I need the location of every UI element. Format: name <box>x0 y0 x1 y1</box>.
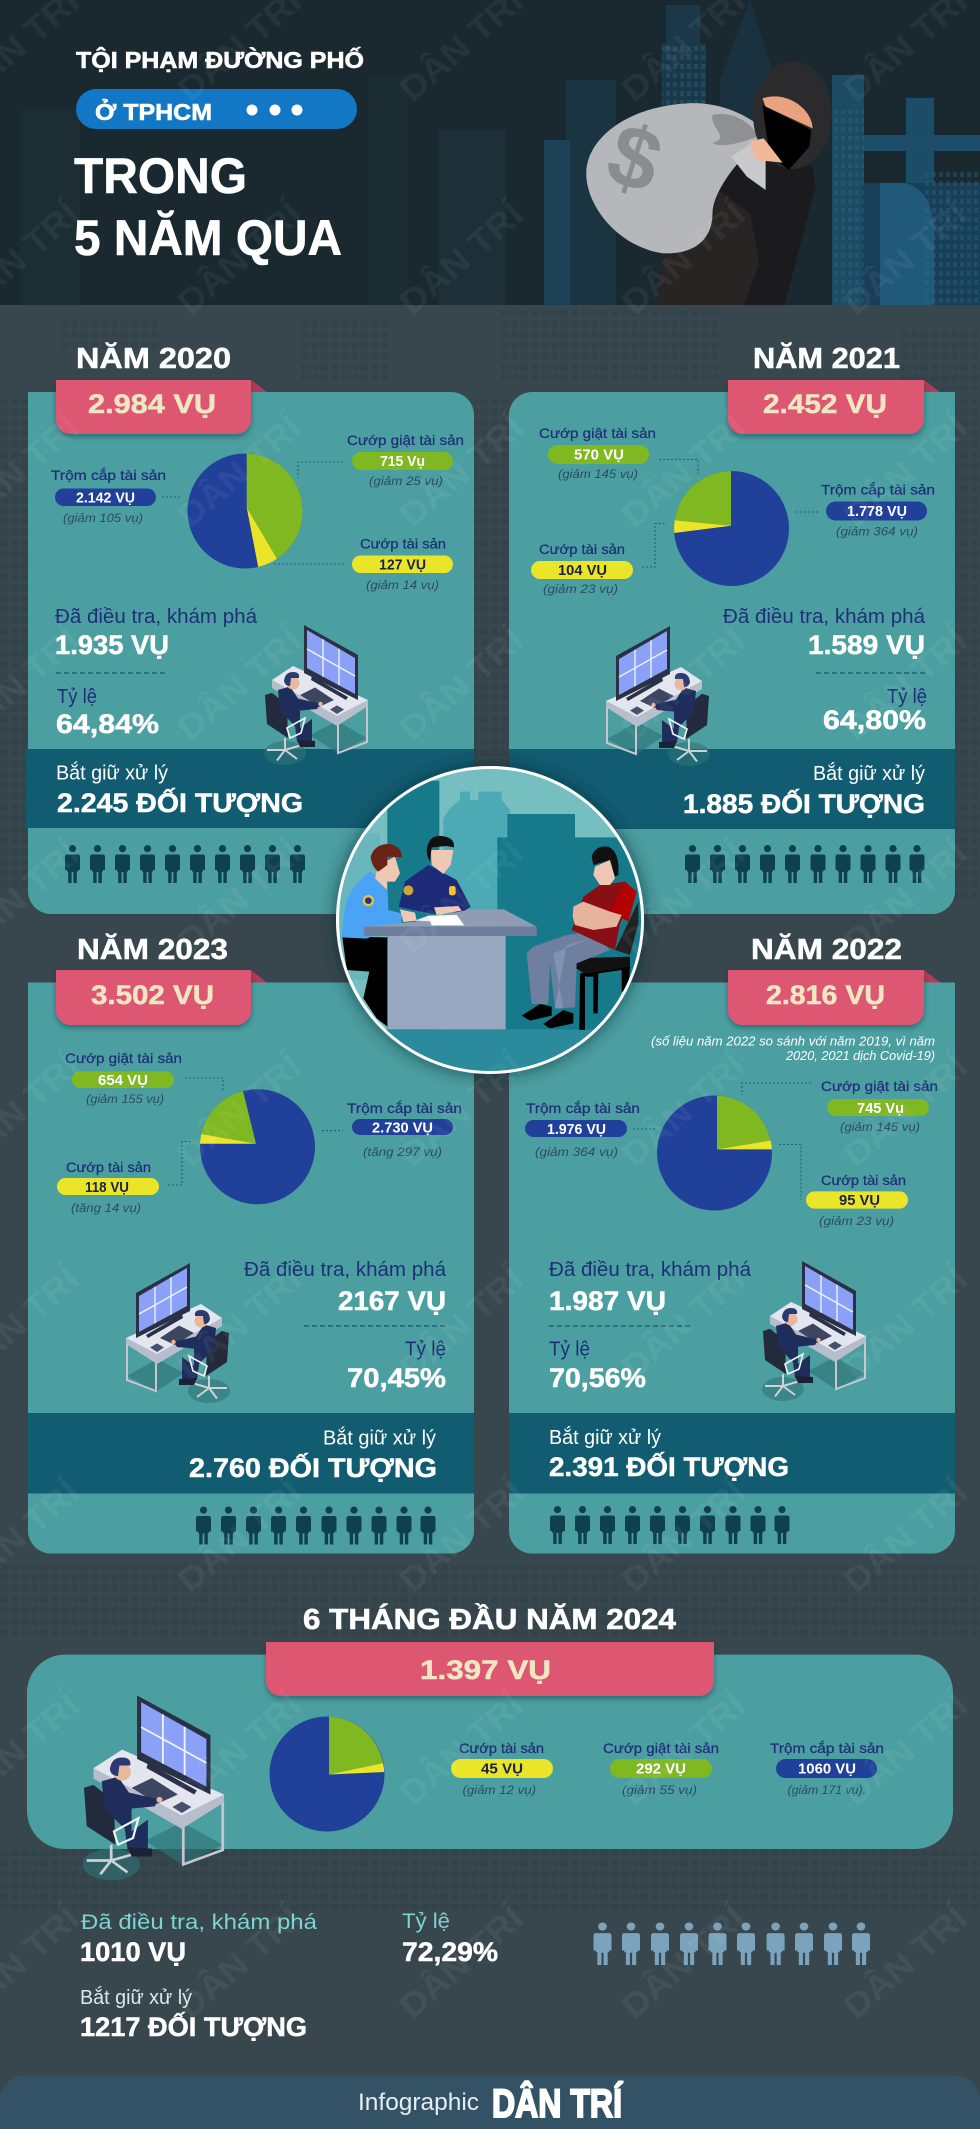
card background <box>28 392 474 914</box>
arrests band: Bắt giữ xử lý <box>813 762 925 785</box>
header city skyline <box>20 0 980 305</box>
title pill: Ở TPHCM <box>76 89 357 129</box>
label: trộm cắp: (tăng 297 vụ) <box>363 1145 442 1159</box>
label: cướp giật: 745 Vụ <box>857 1101 904 1117</box>
label: trộm cắp: Trộm cắp tài sản <box>51 467 166 483</box>
people row <box>550 1506 790 1544</box>
pie chart <box>657 1096 772 1210</box>
stats: investigated: 64,84% <box>56 709 159 739</box>
label: cướp tài sản: 127 VỤ <box>379 558 426 574</box>
label: cướp giật: 654 VỤ <box>98 1073 148 1089</box>
label: trộm cắp: 1.976 VỤ <box>547 1122 606 1138</box>
arrests band: 2.245 ĐỐI TƯỢNG <box>57 788 303 818</box>
label: cướp giật <box>603 1740 719 1797</box>
faint city window texture <box>0 310 980 1910</box>
label: cướp giật: Cướp giật tài sản <box>603 1740 719 1756</box>
footer: DÂN TRÍ <box>492 2080 623 2126</box>
arrests band <box>28 1413 474 1494</box>
icon: worker at computer <box>126 1263 230 1403</box>
stats: investigated: Tỷ lệ <box>405 1339 446 1361</box>
ribbon total <box>56 380 267 434</box>
label: cướp giật: 570 VỤ <box>574 448 624 464</box>
footer: Infographic <box>358 2089 479 2116</box>
label: cướp giật: Cướp giật tài sản <box>347 432 464 448</box>
panel: first half 2024 <box>27 1642 953 1849</box>
watermark pattern: DÂN TRÍ <box>615 1472 754 1600</box>
panel: 2022 <box>509 933 955 1554</box>
watermark pattern: DÂN TRÍ <box>393 833 532 961</box>
label: trộm cắp: Trộm cắp tài sản <box>821 482 935 498</box>
label: cướp tài sản <box>451 1740 553 1797</box>
watermark pattern: DÂN TRÍ <box>171 1685 310 1813</box>
label: trộm cắp: 1060 VỤ <box>798 1762 856 1778</box>
heading 2023: NĂM 2023 <box>77 933 228 966</box>
label: cướp giật: (giảm 155 vụ) <box>86 1092 164 1106</box>
stat: arrests 2024: Bắt giữ xử lý <box>80 1986 192 2009</box>
note about comparison: (số liệu năm 2022 so sánh với năm 2019, vì năm <box>651 1034 935 1048</box>
label: trộm cắp <box>770 1740 884 1797</box>
watermark pattern: DÂN TRÍ <box>615 194 754 322</box>
label: trộm cắp: Trộm cắp tài sản <box>770 1740 884 1756</box>
watermark pattern: DÂN TRÍ <box>393 1472 532 1600</box>
heading 2022: NĂM 2022 <box>751 933 902 966</box>
arrests band: Bắt giữ xử lý <box>323 1426 436 1450</box>
label: cướp giật: 292 VỤ <box>636 1762 686 1778</box>
watermark pattern: DÂN TRÍ <box>615 833 754 961</box>
stat: arrests 2024: 1217 ĐỐI TƯỢNG <box>80 2012 307 2042</box>
stat: investigated 2024 <box>80 1911 317 1967</box>
panel: 2020 <box>26 342 474 914</box>
label: cướp giật: Cướp giật tài sản <box>821 1078 938 1094</box>
stat: investigated 2024: Đã điều tra, khám phá <box>81 1911 317 1934</box>
watermark pattern: DÂN TRÍ <box>615 1046 754 1174</box>
label: cướp tài sản: (giảm 23 vụ) <box>819 1214 894 1228</box>
title line 1: TỘI PHẠM ĐƯỜNG PHỐ <box>76 46 364 73</box>
label: cướp giật: (giảm 145 vụ) <box>840 1120 920 1134</box>
stat: rate 2024 <box>402 1910 498 1967</box>
ribbon total <box>728 380 940 434</box>
arrests band: Bắt giữ xử lý <box>549 1426 661 1449</box>
watermark pattern: DÂN TRÍ <box>837 1898 976 2026</box>
label: cướp giật: Cướp giật tài sản <box>65 1050 182 1066</box>
arrests band: 2.760 ĐỐI TƯỢNG <box>189 1453 437 1483</box>
label: cướp giật <box>298 432 464 488</box>
ribbon total <box>266 1642 714 1696</box>
watermark pattern: DÂN TRÍ <box>615 1259 754 1387</box>
watermark pattern: DÂN TRÍ <box>837 1046 976 1174</box>
card background <box>28 982 474 1554</box>
label: trộm cắp: (giảm 364 vụ) <box>836 524 918 538</box>
watermark pattern: DÂN TRÍ <box>393 1685 532 1813</box>
watermark pattern: DÂN TRÍ <box>393 194 532 322</box>
stats: investigated: 1.987 VỤ <box>549 1286 666 1316</box>
people row <box>685 845 924 883</box>
label: cướp giật: Cướp giật tài sản <box>539 425 656 441</box>
watermark pattern: DÂN TRÍ <box>615 1685 754 1813</box>
pie chart <box>674 471 789 586</box>
label: cướp tài sản <box>274 536 453 592</box>
watermark pattern: DÂN TRÍ <box>171 1898 310 2026</box>
label: cướp giật: 715 Vụ <box>380 454 425 470</box>
watermark pattern: DÂN TRÍ <box>837 1472 976 1600</box>
arrests band: 2.391 ĐỐI TƯỢNG <box>549 1452 789 1482</box>
label: cướp tài sản <box>779 1144 908 1228</box>
label: trộm cắp: Trộm cắp tài sản <box>526 1100 640 1116</box>
heading 2020: NĂM 2020 <box>76 342 231 375</box>
label: trộm cắp: 2.730 VỤ <box>372 1120 433 1136</box>
stats: investigated: 1.935 VỤ <box>55 630 169 660</box>
label: trộm cắp <box>51 467 182 525</box>
watermark pattern: DÂN TRÍ <box>837 407 976 535</box>
label: cướp tài sản: 95 VỤ <box>839 1193 880 1209</box>
stats: investigated: Tỷ lệ <box>887 686 927 708</box>
label: trộm cắp: Trộm cắp tài sản <box>347 1100 462 1116</box>
arrests band <box>509 1413 955 1494</box>
ribbon total: 3.502 VỤ <box>91 980 214 1010</box>
arrests band <box>509 749 955 829</box>
stat: rate 2024: Tỷ lệ <box>402 1910 450 1933</box>
icon: worker at computer <box>762 1261 866 1401</box>
label: trộm cắp: 2.142 VỤ <box>76 490 135 506</box>
stats: investigated <box>55 606 258 739</box>
label: trộm cắp <box>796 482 935 538</box>
label: cướp tài sản: Cướp tài sản <box>360 536 446 552</box>
heading 2021: NĂM 2021 <box>753 342 900 375</box>
label: trộm cắp <box>322 1100 462 1159</box>
watermark pattern: DÂN TRÍ <box>393 1898 532 2026</box>
title pill: Ở TPHCM: Ở TPHCM <box>95 97 212 125</box>
label: cướp tài sản <box>531 524 665 596</box>
watermark pattern: DÂN TRÍ <box>171 1472 310 1600</box>
label: trộm cắp: (giảm 105 vụ) <box>63 511 143 525</box>
label: cướp tài sản: 104 VỤ <box>558 563 607 579</box>
watermark pattern: DÂN TRÍ <box>393 407 532 535</box>
label: cướp giật <box>742 1078 938 1134</box>
header background <box>0 0 980 305</box>
watermark pattern: DÂN TRÍ <box>615 620 754 748</box>
watermark pattern: DÂN TRÍ <box>615 407 754 535</box>
watermark pattern: DÂN TRÍ <box>171 194 310 322</box>
ribbon total: 2.984 VỤ <box>88 389 216 419</box>
arrests band: 1.885 ĐỐI TƯỢNG <box>683 789 925 819</box>
label: cướp tài sản: (tăng 14 vụ) <box>71 1201 141 1215</box>
label: cướp giật: (giảm 55 vụ) <box>622 1783 697 1797</box>
label: cướp tài sản: 45 VỤ <box>481 1762 523 1778</box>
watermark pattern: DÂN TRÍ <box>837 1685 976 1813</box>
stat: rate 2024: 72,29% <box>402 1937 498 1967</box>
stats: investigated <box>244 1259 447 1393</box>
stats: investigated: 64,80% <box>823 705 926 735</box>
card background <box>27 1655 953 1849</box>
watermark pattern: DÂN TRÍ <box>393 620 532 748</box>
stats: investigated: 70,56% <box>549 1363 646 1393</box>
stats: investigated: Đã điều tra, khám phá <box>549 1259 752 1281</box>
icon: worker at computer, large <box>83 1696 224 1880</box>
label: cướp tài sản: Cướp tài sản <box>459 1740 544 1756</box>
card background <box>509 982 955 1554</box>
watermark pattern: DÂN TRÍ <box>393 1259 532 1387</box>
ribbon total: 1.397 VỤ <box>420 1655 551 1685</box>
icon: worker at computer <box>606 626 710 766</box>
note about comparison: 2020, 2021 dịch Covid-19) <box>785 1049 935 1063</box>
watermark pattern: DÂN TRÍ <box>615 1898 754 2026</box>
label: cướp giật: (giảm 25 vụ) <box>369 474 443 488</box>
people row <box>65 845 305 883</box>
label: cướp tài sản: Cướp tài sản <box>66 1159 151 1175</box>
footer <box>0 2076 980 2129</box>
label: trộm cắp <box>525 1100 655 1159</box>
stats: investigated: Tỷ lệ <box>57 686 97 708</box>
watermark pattern: DÂN TRÍ <box>171 1259 310 1387</box>
stats: investigated <box>549 1259 752 1393</box>
arrests band: Bắt giữ xử lý <box>56 762 168 784</box>
label: cướp tài sản: Cướp tài sản <box>539 541 625 557</box>
stats: investigated: Đã điều tra, khám phá <box>723 606 926 628</box>
watermark pattern: DÂN TRÍ <box>837 1259 976 1387</box>
stat: investigated 2024: 1010 VỤ <box>80 1937 186 1967</box>
stats: investigated: 70,45% <box>347 1363 446 1393</box>
heading 2024: 6 THÁNG ĐẦU NĂM 2024 <box>303 1602 676 1636</box>
label: cướp tài sản: 118 VỤ <box>85 1180 129 1196</box>
watermark pattern: DÂN TRÍ <box>393 1046 532 1174</box>
stat: arrests 2024 <box>80 1986 307 2042</box>
panel: 2023 <box>28 933 474 1554</box>
label: trộm cắp: 1.778 VỤ <box>847 504 907 520</box>
note about comparison <box>651 1034 935 1063</box>
label: cướp tài sản: (giảm 23 vụ) <box>543 582 618 596</box>
stats: investigated: Đã điều tra, khám phá <box>244 1259 447 1281</box>
label: cướp tài sản: (giảm 12 vụ) <box>462 1783 536 1797</box>
title line 2: TRONG <box>74 148 247 204</box>
label: cướp tài sản: Cướp tài sản <box>821 1172 906 1188</box>
label: cướp giật <box>539 425 698 481</box>
stats: investigated: Tỷ lệ <box>549 1339 590 1361</box>
panel: 2021 <box>509 342 955 914</box>
ribbon total: 2.816 VỤ <box>766 980 885 1010</box>
icon: worker at computer <box>264 625 368 765</box>
label: cướp tài sản: (giảm 14 vụ) <box>366 578 439 592</box>
label: trộm cắp: (giảm 171 vụ). <box>788 1783 866 1797</box>
pie chart <box>270 1716 384 1832</box>
label: cướp giật <box>65 1050 223 1106</box>
watermark pattern: DÂN TRÍ <box>171 1046 310 1174</box>
watermark pattern: DÂN TRÍ <box>171 833 310 961</box>
stats: investigated: 2167 VỤ <box>338 1286 446 1316</box>
pie chart <box>188 454 303 568</box>
pie chart <box>200 1089 315 1204</box>
icon: dollar sign on bag: $ <box>596 103 673 212</box>
stats: investigated: Đã điều tra, khám phá <box>55 606 258 628</box>
watermark pattern: DÂN TRÍ <box>837 620 976 748</box>
people row 2024 <box>594 1922 870 1965</box>
ribbon total: 2.452 VỤ <box>763 389 887 419</box>
central circle illustration: police interview <box>333 766 647 1077</box>
title line 3: 5 NĂM QUA <box>74 210 342 266</box>
card background <box>509 392 955 914</box>
stats: investigated <box>723 606 927 735</box>
label: trộm cắp: (giảm 364 vụ) <box>535 1145 618 1159</box>
people row <box>196 1506 436 1544</box>
watermark pattern: DÂN TRÍ <box>837 194 976 322</box>
watermark pattern: DÂN TRÍ <box>837 833 976 961</box>
ribbon total <box>728 970 940 1025</box>
ribbon total <box>56 970 267 1025</box>
watermark pattern: DÂN TRÍ <box>171 620 310 748</box>
label: cướp giật: (giảm 145 vụ) <box>558 467 638 481</box>
stats: investigated: 1.589 VỤ <box>808 630 925 660</box>
arrests band <box>26 749 474 828</box>
illustration: thief carrying money bag <box>586 61 832 305</box>
label: cướp tài sản <box>57 1142 191 1215</box>
watermark pattern: DÂN TRÍ <box>171 407 310 535</box>
